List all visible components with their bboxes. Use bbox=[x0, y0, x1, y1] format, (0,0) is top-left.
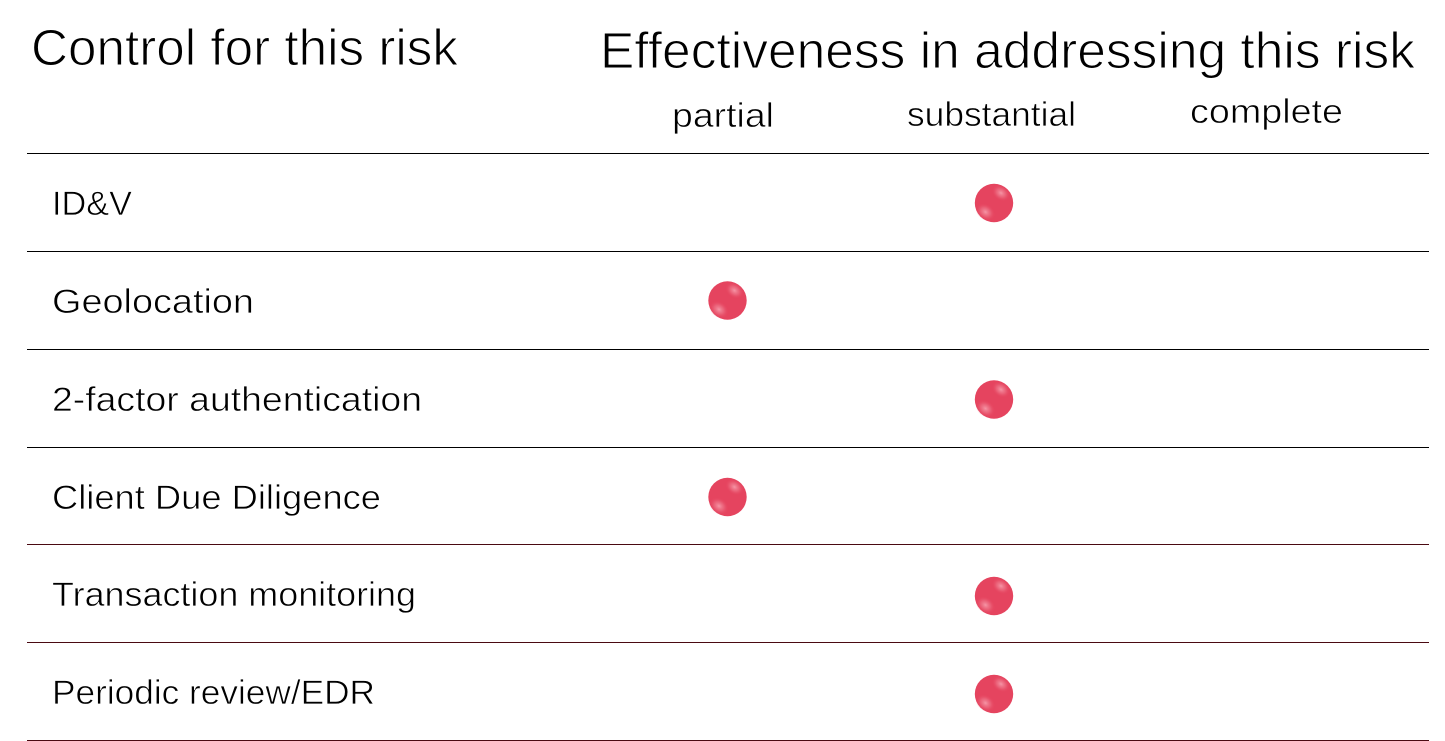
row: Periodic review/EDR: Periodic review/EDR bbox=[52, 674, 375, 712]
marker: substantial bbox=[972, 181, 1013, 225]
marker: partial bbox=[706, 279, 747, 322]
row: Client Due Diligence bbox=[52, 475, 747, 519]
row: 2-factor authentication: 2-factor authentication bbox=[52, 381, 422, 419]
row: Client Due Diligence: Client Due Diligence bbox=[52, 479, 381, 517]
row: Periodic review/EDR bbox=[52, 672, 1013, 716]
marker: substantial bbox=[972, 574, 1013, 618]
row: Transaction monitoring bbox=[52, 574, 1013, 618]
marker: partial bbox=[706, 475, 747, 519]
heading: control column: Control for this risk bbox=[31, 19, 459, 76]
marker: substantial bbox=[972, 672, 1013, 716]
row: Geolocation: Geolocation bbox=[52, 283, 254, 321]
column label: substantial: substantial bbox=[907, 96, 1076, 134]
row: ID&V bbox=[52, 181, 1013, 225]
row: ID&V: ID&V bbox=[52, 185, 132, 223]
marker: substantial bbox=[972, 378, 1013, 421]
row: Transaction monitoring: Transaction monitoring bbox=[52, 576, 416, 614]
heading: effectiveness column: Effectiveness in addressing this risk bbox=[600, 22, 1416, 79]
column label: complete: complete bbox=[1190, 93, 1343, 131]
row: 2-factor authentication bbox=[52, 378, 1013, 421]
row: Geolocation bbox=[52, 279, 747, 322]
column label: partial: partial bbox=[672, 97, 774, 135]
